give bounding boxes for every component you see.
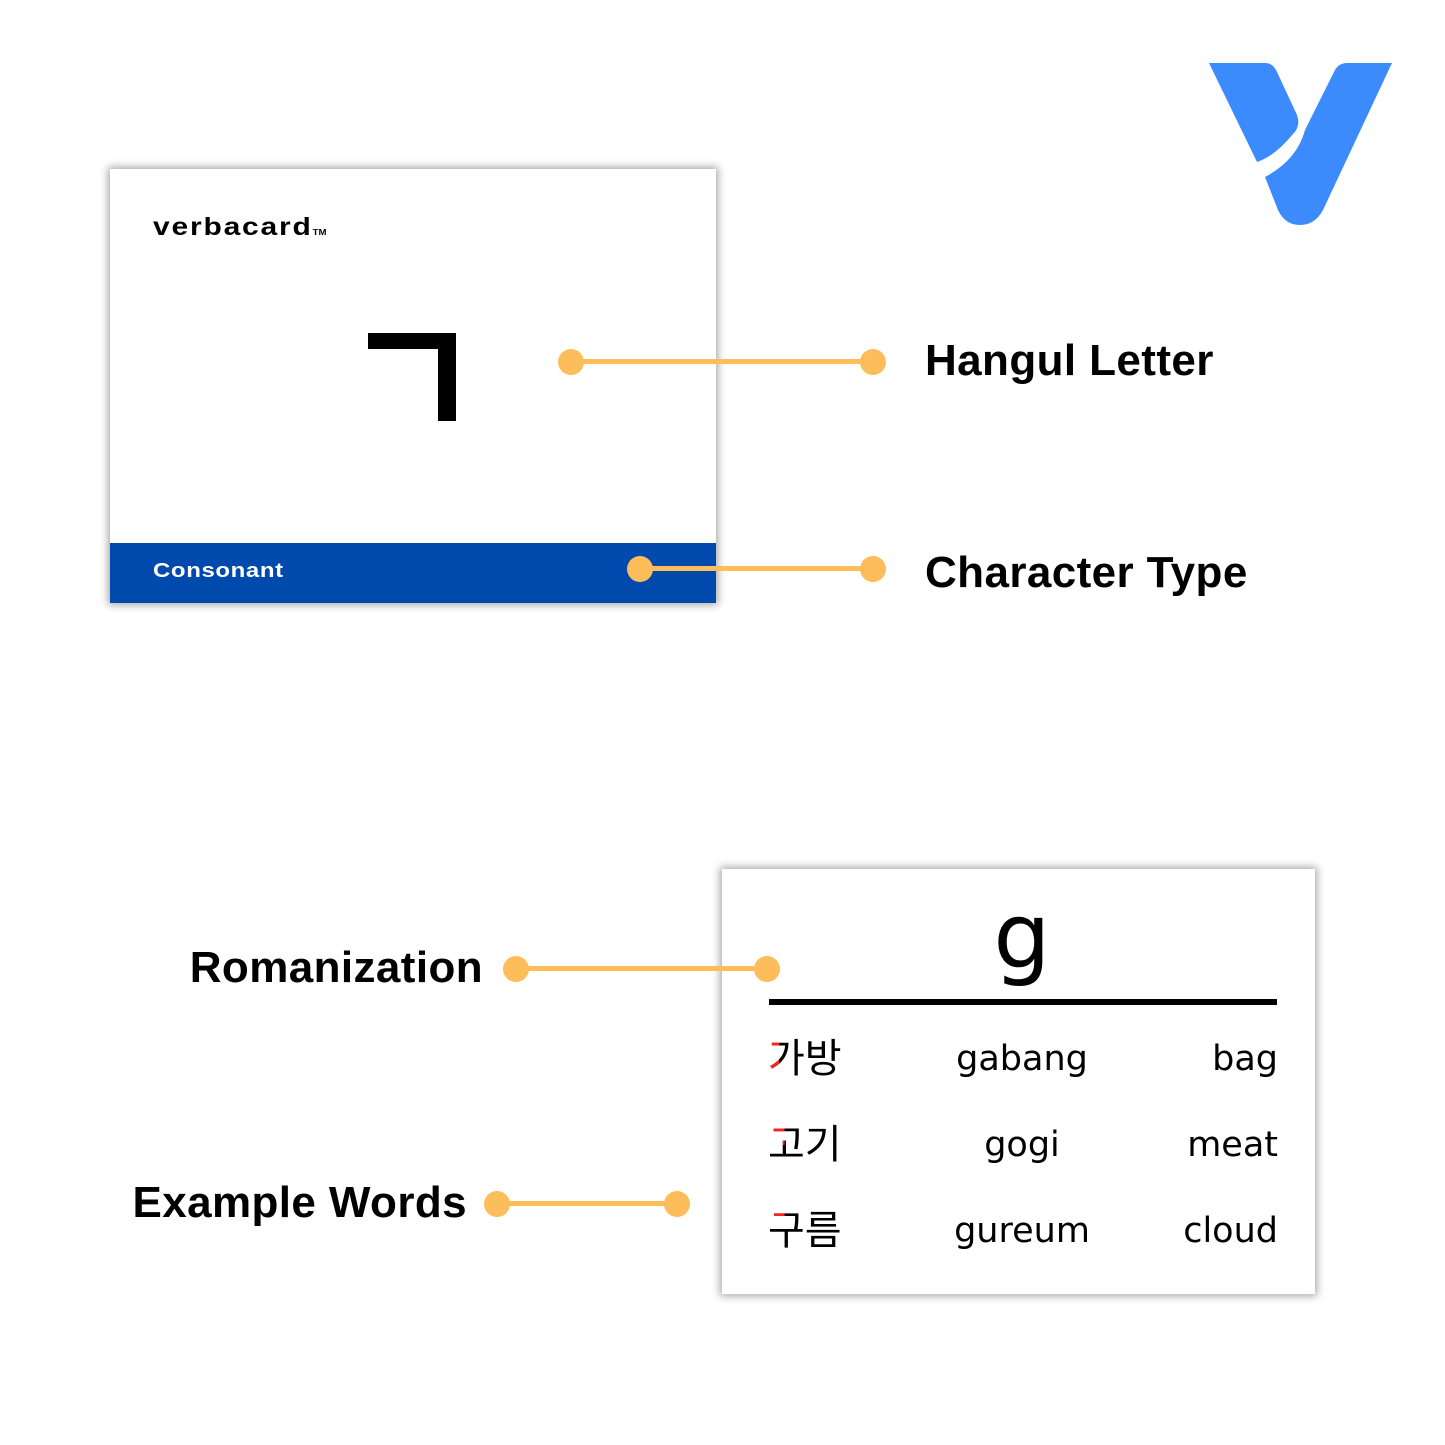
example words: cloud	[1183, 1211, 1278, 1251]
example words: 고	[768, 1112, 805, 1170]
connector: example words	[484, 1191, 690, 1217]
character type band	[110, 543, 716, 603]
romanization letter: g	[993, 884, 1051, 989]
card: back	[722, 869, 1315, 1294]
example words: 구름	[768, 1198, 842, 1256]
logo: verbacard V	[1209, 63, 1392, 225]
connector: hangul letter	[558, 349, 886, 375]
example words: bag	[1212, 1039, 1278, 1079]
hangul letter	[368, 333, 456, 421]
example words	[768, 1026, 1278, 1256]
example words: gureum	[954, 1211, 1090, 1251]
example words: 가방	[768, 1026, 842, 1084]
example words: meat	[1187, 1125, 1278, 1165]
connector: character type	[627, 556, 886, 582]
divider	[769, 999, 1277, 1005]
example words: 가	[768, 1026, 805, 1084]
label: Example Words: Example Words	[132, 1178, 467, 1227]
character type band: Consonant	[153, 560, 284, 582]
example words: 고기	[768, 1112, 842, 1170]
example words: 구	[768, 1198, 805, 1256]
label: Romanization: Romanization	[190, 943, 483, 992]
label: Character Type: Character Type	[925, 548, 1248, 597]
label: Hangul Letter: Hangul Letter	[925, 336, 1214, 385]
connector: romanization	[503, 956, 780, 982]
card: front	[110, 169, 716, 603]
brand text: verbacardTM	[153, 213, 327, 241]
example words: gabang	[956, 1039, 1088, 1079]
example words: gogi	[984, 1125, 1060, 1165]
